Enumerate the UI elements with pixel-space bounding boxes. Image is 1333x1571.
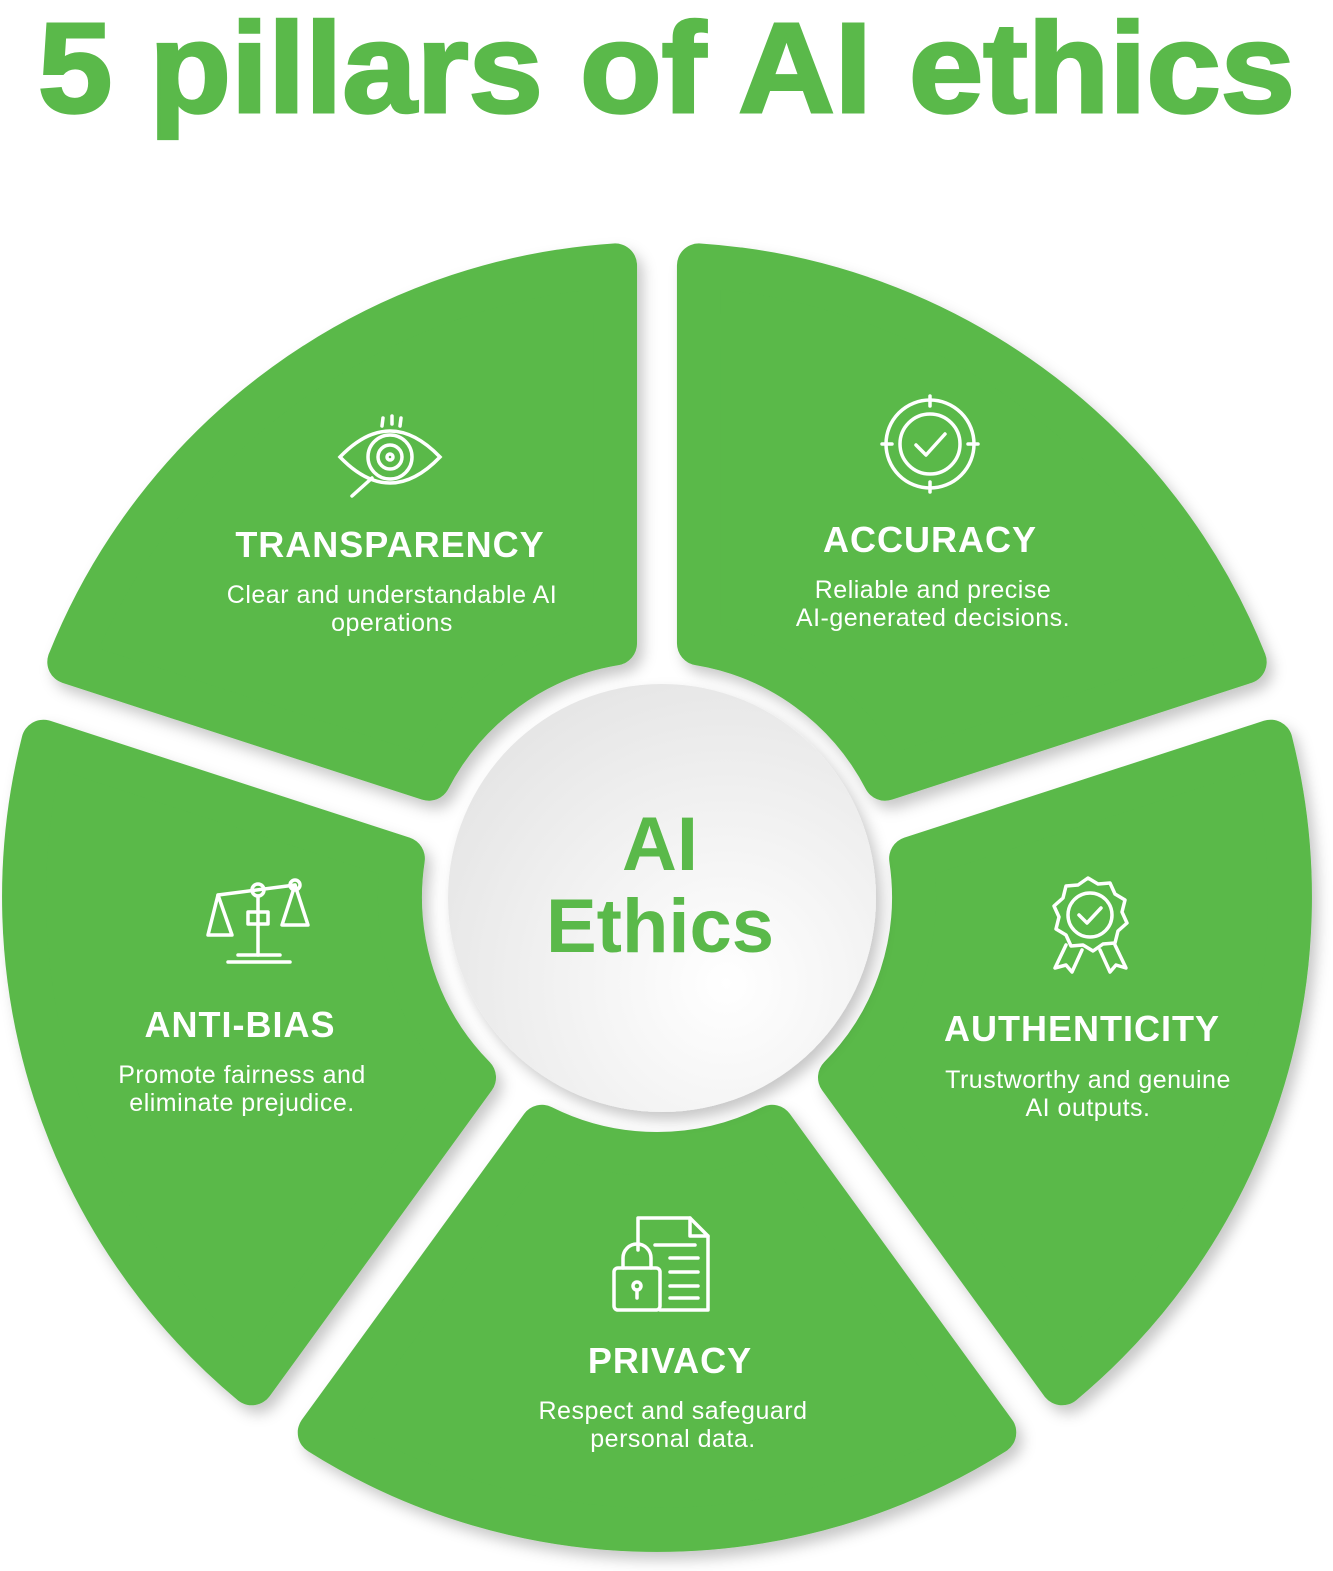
block: anti-bias: ANTI-BIAS bbox=[144, 1004, 336, 1045]
block: authenticity: AI outputs. bbox=[1025, 1094, 1151, 1122]
segment: authenticity bbox=[771, 647, 1333, 1413]
segment: accuracy bbox=[519, 187, 1302, 909]
segment: transparency bbox=[12, 187, 795, 909]
center label: AI bbox=[622, 802, 698, 887]
icon: scales bbox=[208, 880, 308, 962]
center circle bbox=[448, 684, 876, 1112]
block: accuracy: ACCURACY bbox=[823, 519, 1037, 560]
icon: eye with magnifier bbox=[340, 416, 440, 496]
segment: privacy bbox=[320, 1127, 994, 1530]
block: authenticity bbox=[944, 878, 1231, 1122]
block: authenticity: Trustworthy and genuine bbox=[945, 1066, 1231, 1094]
block: privacy: Respect and safeguard bbox=[538, 1397, 808, 1425]
block: anti-bias: Promote fairness and bbox=[118, 1061, 366, 1089]
icon: document lock bbox=[614, 1218, 708, 1310]
block: privacy: personal data. bbox=[590, 1425, 756, 1453]
block: authenticity: AUTHENTICITY bbox=[944, 1008, 1220, 1049]
title: 5 pillars of AI ethics bbox=[38, 0, 1295, 140]
icon: target check bbox=[882, 396, 978, 492]
block: anti-bias: eliminate prejudice. bbox=[129, 1089, 355, 1117]
block: accuracy: AI-generated decisions. bbox=[796, 604, 1070, 632]
block: privacy bbox=[538, 1218, 808, 1453]
segment: anti-bias bbox=[0, 647, 543, 1413]
center circle: Ethics bbox=[546, 884, 774, 969]
block: accuracy: Reliable and precise bbox=[815, 576, 1051, 604]
block: accuracy bbox=[796, 396, 1070, 632]
icon: badge check bbox=[1054, 878, 1127, 972]
block: transparency: Clear and understandable AI bbox=[227, 581, 557, 609]
block: privacy: PRIVACY bbox=[588, 1340, 752, 1381]
block: transparency: TRANSPARENCY bbox=[235, 524, 545, 565]
block: transparency: operations bbox=[331, 609, 453, 637]
block: transparency bbox=[227, 416, 557, 637]
block: anti-bias bbox=[118, 880, 366, 1117]
